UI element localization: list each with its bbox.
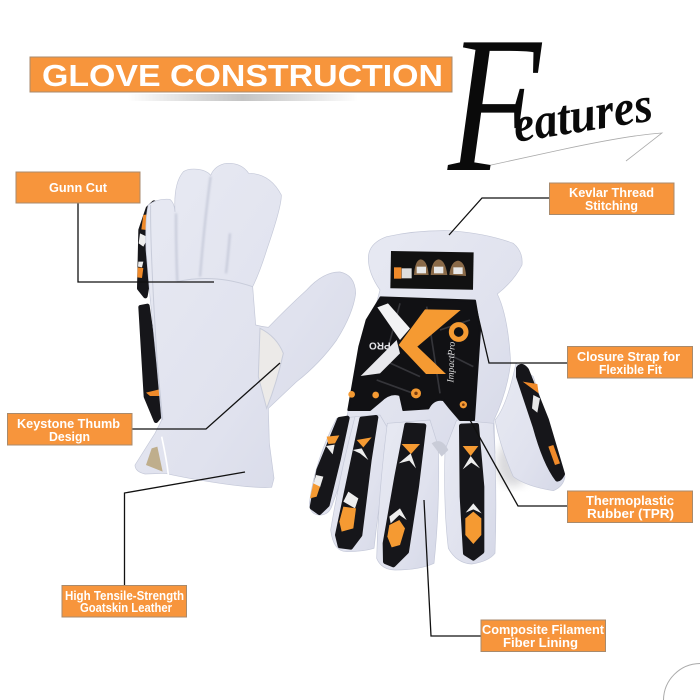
leather body <box>135 163 356 487</box>
tread lines <box>377 303 473 393</box>
leader line: Keystone Thumb <box>132 363 280 429</box>
back-of-hand pads visible at side <box>137 203 161 421</box>
leader line: Goatskin Leather <box>124 472 245 586</box>
orange rivets <box>348 388 467 408</box>
label: Gunn Cut: Gunn Cut <box>49 181 108 195</box>
finger: third <box>377 420 439 570</box>
label: Kevlar Thread Stitching: Kevlar Thread <box>569 186 654 200</box>
finger: fourth <box>445 420 496 564</box>
label: Keystone Thumb Design <box>8 414 132 445</box>
thumb <box>495 363 565 491</box>
label: Kevlar Thread Stitching <box>550 183 674 214</box>
PRO mark: PRO <box>369 340 391 351</box>
label: Keystone Thumb Design: Keystone Thumb <box>17 417 120 431</box>
finger pads <box>310 417 482 565</box>
shadow under fingers <box>497 440 530 487</box>
cuff and hand leather <box>343 231 522 453</box>
title banner: GLOVE CONSTRUCTION <box>42 58 443 93</box>
label: High Tensile-Strength Goatskin Leather: High Tensile-Strength <box>65 589 184 603</box>
label: Closure Strap for Flexible Fit: Flexible Fit <box>599 363 663 377</box>
label: Thermoplastic Rubber (TPR) <box>568 491 692 522</box>
orange ring <box>451 325 466 339</box>
label: Keystone Thumb Design: Design <box>49 430 90 444</box>
label: Gunn Cut <box>16 172 140 203</box>
left glove: palm view <box>135 163 356 487</box>
X logo <box>361 303 461 376</box>
leader line: Composite Filament <box>424 500 481 636</box>
label: Composite Filament Fiber Lining <box>481 620 606 652</box>
knuckle hollow <box>432 441 448 457</box>
TPR knuckle shield <box>348 297 480 420</box>
leader line: Closure Strap <box>475 303 568 363</box>
label: Composite Filament Fiber Lining: Fiber Lining <box>503 636 578 650</box>
leader line: Gunn Cut <box>78 203 214 282</box>
label: High Tensile-Strength Goatskin Leather <box>62 586 186 617</box>
keystone thumb seam <box>258 328 283 408</box>
label: Composite Filament Fiber Lining: Composite Filament <box>482 623 605 637</box>
leader line: Kevlar Thread <box>449 198 549 235</box>
corner arc decoration <box>664 664 700 700</box>
finger creases <box>176 177 230 282</box>
title shadow <box>128 94 358 101</box>
label: Closure Strap for Flexible Fit: Closure Strap for <box>577 350 680 364</box>
label: Kevlar Thread Stitching: Stitching <box>585 199 638 213</box>
script heading: Features: eatures <box>509 76 656 153</box>
script heading: Features: F <box>447 0 543 212</box>
ImpactPro script: ImpactPro <box>445 341 458 384</box>
size label patch <box>390 251 474 290</box>
script heading: Features <box>447 0 662 212</box>
label: Closure Strap for Flexible Fit <box>568 346 692 378</box>
cuff opening <box>146 447 163 472</box>
label: Thermoplastic Rubber (TPR): Rubber (TPR) <box>587 507 674 521</box>
right glove: back view <box>309 231 565 570</box>
label: Thermoplastic Rubber (TPR): Thermoplastic <box>586 494 674 508</box>
leader line: TPR <box>470 420 568 506</box>
finger: second <box>331 415 391 552</box>
label: High Tensile-Strength Goatskin Leather: Goatskin Leather <box>80 601 172 615</box>
finger: leftmost <box>309 417 357 515</box>
